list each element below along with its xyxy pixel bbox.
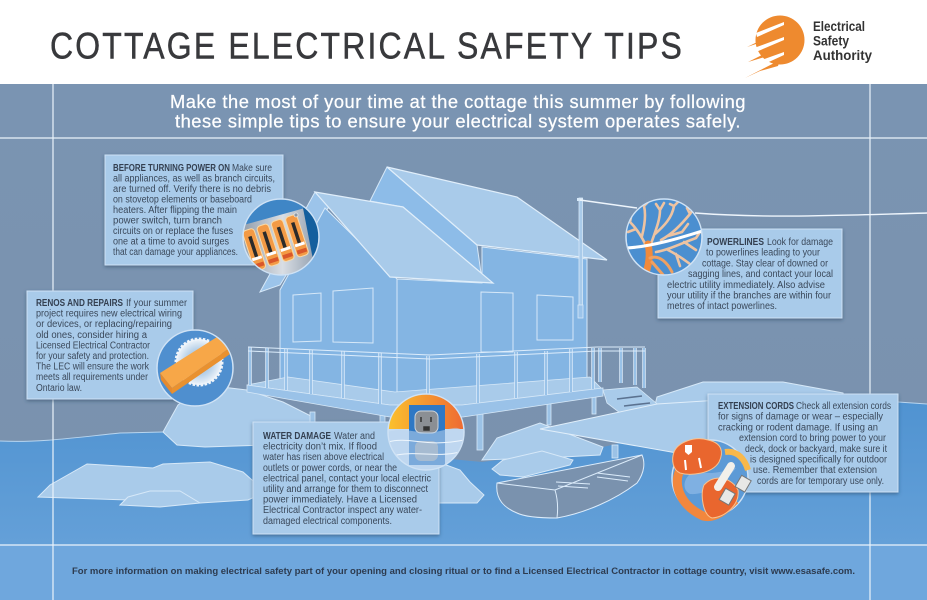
logo: Electrical Safety Authority [745,16,872,78]
panel: water damage: electricity don’t mix. If flood [263,442,377,453]
panel: water damage: water has risen above electrical [262,452,384,463]
panel: water damage: Electrical Contractor inspect any water- [263,505,422,516]
panel: renos and repairs: for your safety and protection. [36,351,149,362]
panel: before turning power on: one at a time to avoid surges [113,236,229,248]
panel: renos and repairs: The LEC will ensure the work [36,362,150,373]
panel: renos and repairs: Ontario law. [36,383,82,394]
panel: powerlines: electric utility immediately. Also advise [667,280,825,291]
panel: extension cords: Check all extension cords [796,401,891,412]
rock: small left [120,491,200,507]
back wall [397,247,587,395]
panel: before turning power on: BEFORE TURNING POWER ON [113,163,230,174]
panel: renos and repairs: RENOS AND REPAIRS [36,298,123,309]
front wall [280,208,397,400]
panel: renos and repairs: meets all requirements under [36,372,149,383]
island: left [38,462,270,503]
plug male [702,478,738,518]
back gable band [370,167,493,283]
icon: extension cord plugs [672,439,751,518]
panel: extension cords: EXTENSION CORDS [718,401,794,412]
panel: extension cords: use. Remember that extension [753,465,877,476]
panel: powerlines [658,229,842,318]
background rocks and islands [38,382,860,507]
logo: Electrical Safety Authority: Electrical [813,18,865,34]
footer note: For more information on making electrical safety part of your opening and closing ritual or to find a Licensed Electrical Contractor in cottage country, visit www.esasafe.com. [72,565,855,576]
panel: renos and repairs: or devices, or replacing/repairing [36,319,172,330]
panel: extension cords: cracking or rodent damage. If using an [718,422,878,433]
panel: before turning power on: that can damage your appliances. [113,247,238,258]
windows and door [293,288,573,352]
back roof [387,167,607,260]
water [0,402,927,600]
panel: before turning power on [105,155,283,265]
shoreline highlight [0,432,163,441]
panel: water damage: electrical panel, contact your local electric [263,473,431,484]
panel: renos and repairs: If your summer [126,298,188,309]
panel: renos and repairs [27,291,193,399]
deck surface [247,377,603,405]
panel: before turning power on: all appliances, as well as branch circuits, [113,174,275,184]
intro text: Make the most of your time at the cottage this summer by following [170,92,746,112]
panel: water damage [253,422,439,534]
power line [580,200,927,216]
icon: saw blade cutting board [157,330,233,406]
panel: extension cords: is designed specifically for outdoor [750,454,888,466]
panel: water damage: damaged electrical components. [263,516,392,527]
panel: before turning power on: circuits on or replace the fuses [113,226,233,237]
deck railing [248,347,645,407]
panel: extension cords: for signs of damage or wear – especially [718,412,883,423]
panel: powerlines: to powerlines leading to your [706,248,821,259]
icon: wall outlet in flood water [388,394,464,470]
rock: centre lower [492,451,573,477]
rock: centre [482,423,603,460]
panel: before turning power on: are turned off. Verify there is no debris [113,184,271,195]
panel: before turning power on: power switch, turn branch [113,216,222,226]
background sky panel [0,84,927,484]
piles [310,392,618,458]
front roof [315,192,493,283]
intro text: these simple tips to ensure your electrical system operates safely. [175,112,741,132]
panel: before turning power on: heaters. After flipping the main [113,205,237,216]
icon: tree branches on powerline [626,199,702,276]
rock: right shore [650,382,860,460]
deck front beam [247,385,603,417]
icon: fuse panel [242,198,320,276]
rock: left shore [163,385,313,447]
deck stairs [603,387,662,423]
panel: before turning power on: on stovetop elements or baseboard [113,194,252,206]
plug socket [673,439,721,474]
header band [0,0,927,84]
panel: water damage: outlets or power cords, or near the [263,463,397,474]
footer band [0,545,927,600]
panel: powerlines: your utility if the branches are within four [667,290,832,302]
panel: water damage: power immediately. Have a Licensed [263,495,417,506]
panel: powerlines: metres of intact powerlines. [667,301,777,312]
panel: extension cords: deck, dock or backyard, make sure it [745,444,887,455]
panel: renos and repairs: Licensed Electrical Contractor [36,340,151,351]
panel: extension cords: cords are for temporary use only. [757,476,884,487]
dock [540,400,720,453]
panel: powerlines: cottage. Stay clear of downed or [702,258,829,269]
rock: left of boat [438,462,484,503]
panel: extension cords [708,394,898,492]
panel: renos and repairs: old ones, consider hiring a [36,330,147,341]
panel: before turning power on: Make sure [232,163,272,174]
cottage [247,167,662,458]
logo: Electrical Safety Authority: Authority [813,47,872,63]
panel: water damage: Water and [334,431,375,442]
title: COTTAGE ELECTRICAL SAFETY TIPS [50,26,684,66]
canoe [497,455,644,518]
panel: powerlines: sagging lines, and contact your local [688,269,833,280]
panel: powerlines: Look for damage [767,237,833,248]
electrical mast and service box [577,198,583,318]
logo: Electrical Safety Authority: Safety [813,32,849,48]
front gable trim [260,192,330,292]
panel: powerlines: POWERLINES [707,237,764,248]
panel: renos and repairs: project requires new electrical wiring [36,309,182,320]
panel: extension cords: extension cord to bring power to your [739,433,887,444]
panel: water damage: utility and arrange for them to disconnect [263,484,428,495]
panel: water damage: WATER DAMAGE [263,431,331,442]
intro text [170,92,746,132]
